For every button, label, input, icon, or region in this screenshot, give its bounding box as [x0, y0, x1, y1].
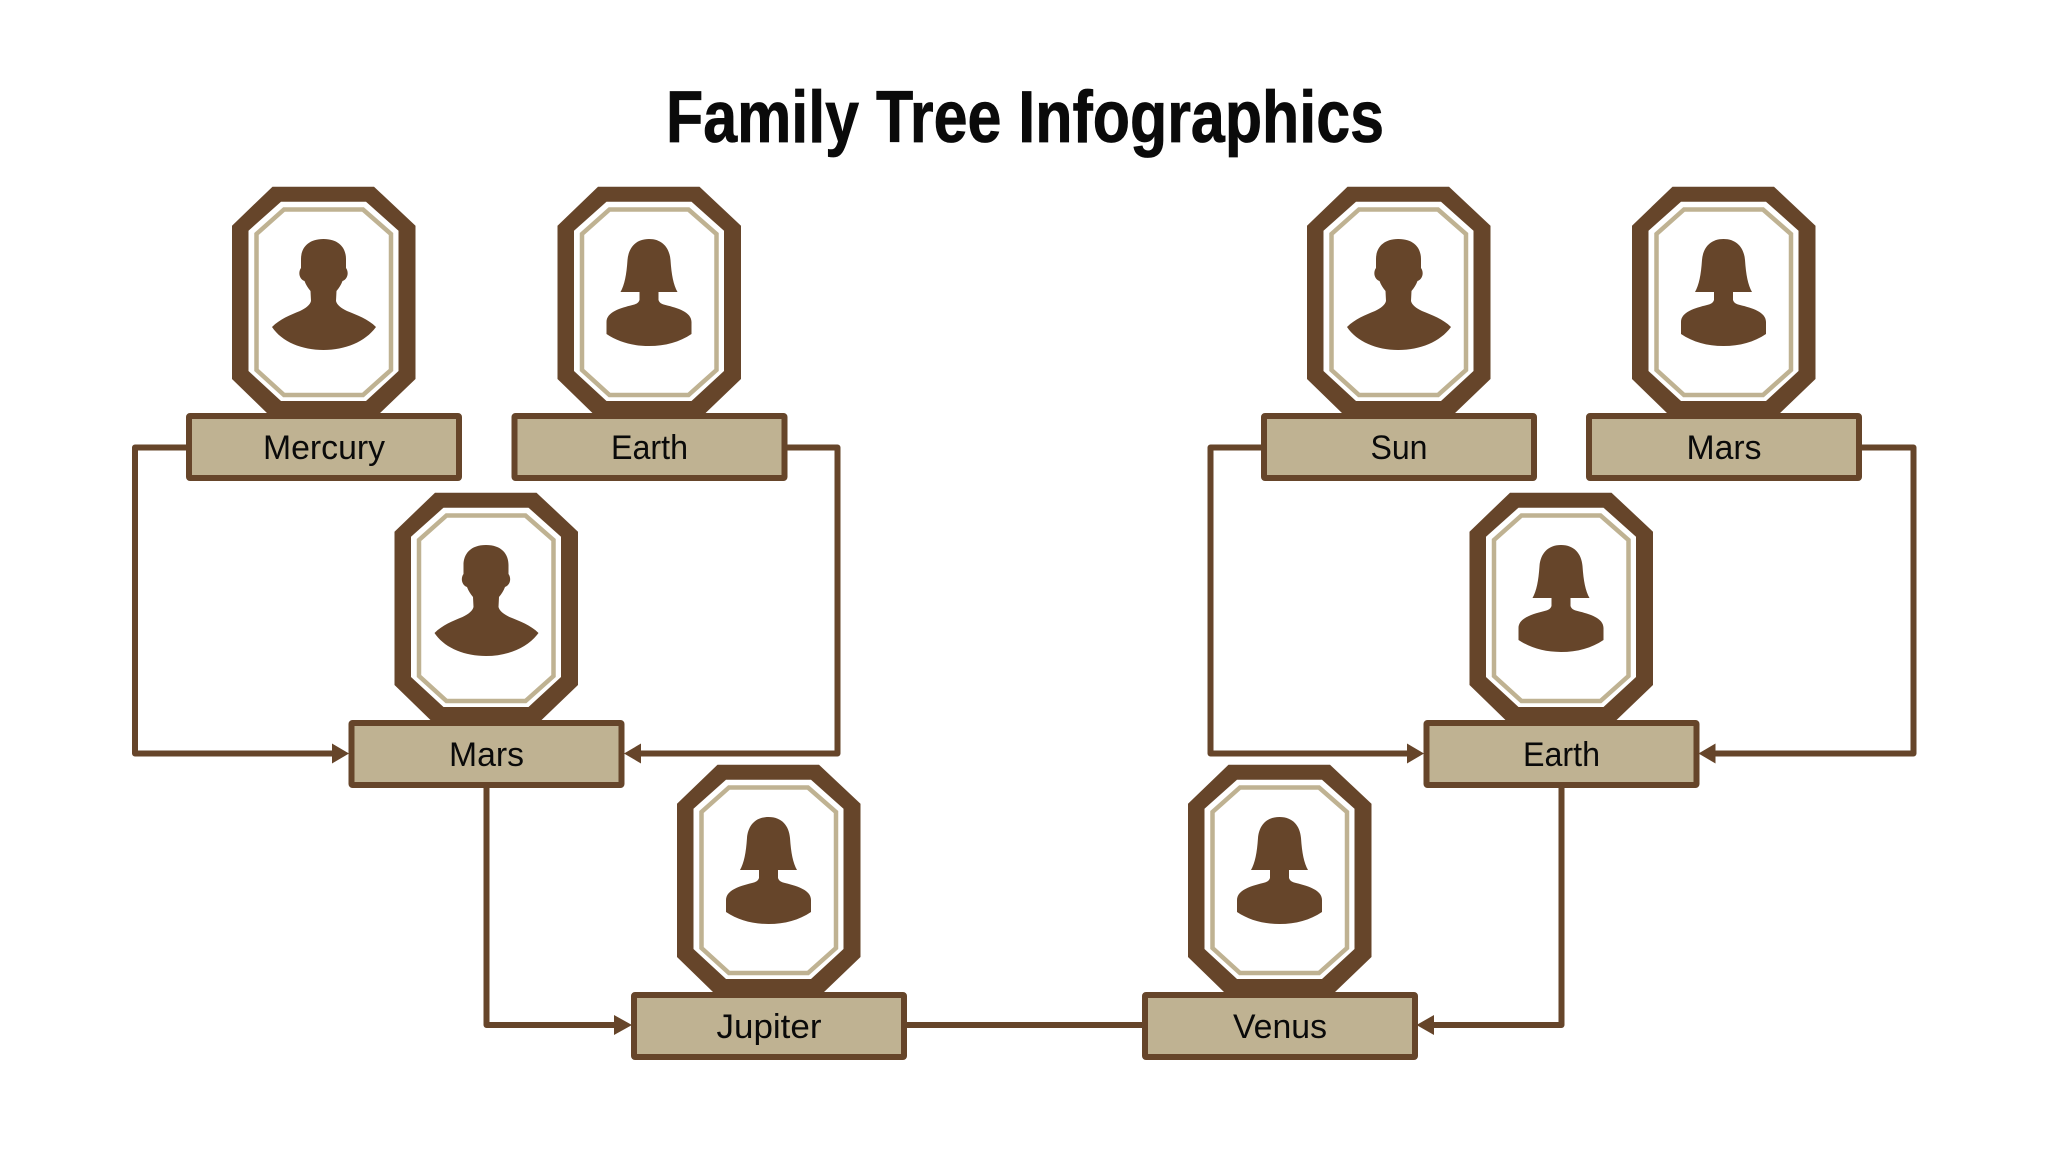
arrow: Sun to Earth	[1210, 448, 1424, 764]
connectors: left family	[135, 448, 838, 1035]
card: Earth (middle)	[1426, 493, 1696, 785]
arrow: Mercury to Mars	[135, 448, 349, 764]
card: Earth (top): Earth	[611, 429, 688, 467]
title: Family Tree Infographics	[666, 77, 1384, 158]
arrow: Mars to Earth	[1698, 448, 1914, 764]
card: Mars (top)	[1589, 187, 1859, 478]
card: Jupiter	[634, 765, 904, 1057]
connectors: right family	[1210, 448, 1914, 1035]
card: Mars (middle)	[352, 493, 622, 785]
card: Sun	[1264, 187, 1534, 478]
card: Mars (top): Mars	[1686, 429, 1762, 467]
card: Earth (top)	[514, 187, 784, 478]
card: Venus	[1145, 765, 1415, 1057]
card: Venus: Venus	[1233, 1008, 1327, 1046]
card: Mars (middle): Mars	[449, 736, 524, 774]
card: Sun: Sun	[1370, 429, 1428, 467]
card: Earth (middle): Earth	[1523, 736, 1600, 774]
connector: Jupiter to Venus	[906, 1022, 1143, 1028]
arrow: Mars to Jupiter	[486, 787, 632, 1035]
card: Mercury	[189, 187, 459, 478]
arrow: Earth to Venus	[1416, 787, 1562, 1035]
card: Mercury: Mercury	[263, 429, 385, 467]
card: Jupiter: Jupiter	[716, 1008, 822, 1046]
arrow: Earth to Mars	[624, 448, 838, 764]
